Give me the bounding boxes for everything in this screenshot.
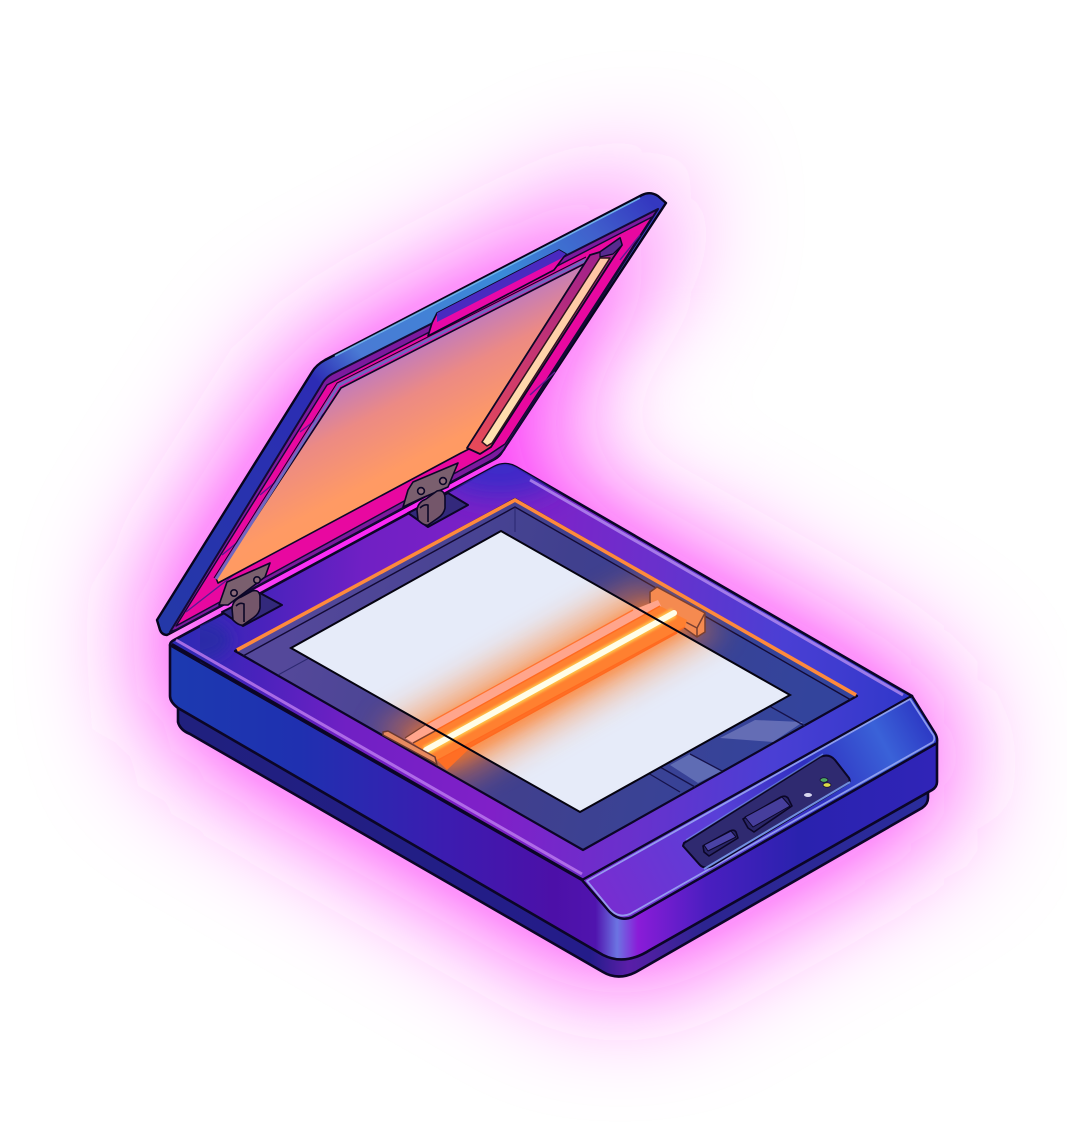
lid light highlight	[335, 198, 640, 356]
lid lamp	[482, 258, 610, 446]
paper outline	[291, 531, 790, 812]
scan light bar	[375, 580, 725, 785]
orange trim	[237, 500, 856, 695]
scan bed	[235, 499, 857, 850]
frame segments	[186, 235, 640, 612]
paper sheet	[291, 531, 790, 812]
open lid	[157, 193, 666, 635]
control panel	[683, 754, 850, 869]
lid outer edge	[157, 193, 666, 635]
highlight along front edge	[176, 640, 582, 874]
bracket rear	[650, 587, 705, 637]
lid magenta frame	[176, 217, 652, 626]
indicators	[804, 793, 812, 797]
side faces	[170, 645, 937, 959]
highlight along rear edge	[530, 480, 903, 695]
scanner base	[130, 444, 937, 976]
large button	[743, 796, 792, 832]
lid purple rim	[170, 209, 658, 632]
bracket front	[383, 731, 437, 765]
glass reflections	[720, 720, 803, 742]
glass well	[235, 499, 857, 850]
small button	[703, 830, 738, 856]
front hinge	[219, 563, 270, 625]
lid lamp recess	[467, 238, 622, 454]
beam bands	[405, 600, 662, 743]
illustration: flatbed scanner	[56, 106, 1041, 1073]
foot	[178, 700, 928, 976]
hinge recesses on base	[222, 493, 468, 626]
front chamfer panel	[582, 696, 937, 919]
top face	[170, 464, 912, 881]
handle recess	[428, 250, 566, 336]
rear hinge	[403, 463, 458, 525]
glass panel	[216, 263, 586, 583]
